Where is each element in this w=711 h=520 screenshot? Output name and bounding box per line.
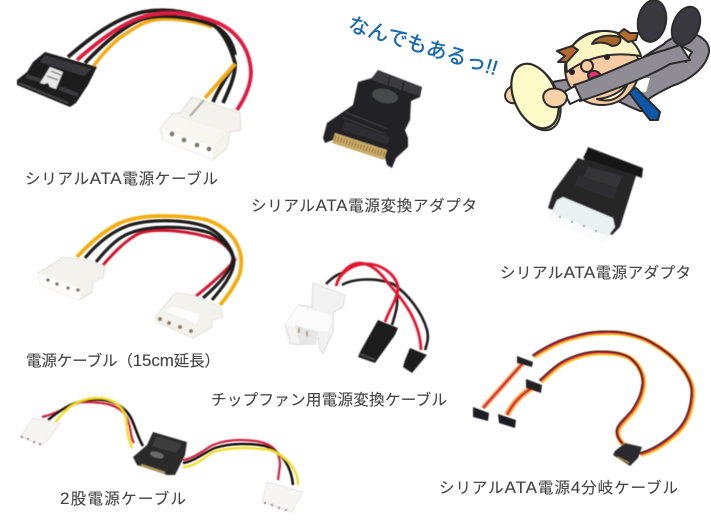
shirt (628, 78, 650, 92)
face (569, 69, 575, 75)
product: power cable 15cm extension (38, 216, 241, 338)
shoes (635, 0, 669, 44)
caption: power cable 15cm extension: 電源ケーブル（15cm延長） (26, 351, 220, 370)
product: SATA power adapter (548, 147, 643, 243)
caption: SATA power conversion adapter: シリアルATA電源変換アダプタ (251, 196, 477, 215)
caption: SATA power cable: シリアルATA電源ケーブル (25, 169, 218, 188)
caption: SATA power adapter: シリアルATA電源アダプタ (500, 263, 691, 282)
main SATA connector (613, 443, 642, 466)
product: chip fan power conversion cable (285, 263, 428, 373)
far arm (552, 76, 590, 92)
front hand (543, 89, 567, 107)
caption: SATA power four-branch cable: シリアルATA電源4分岐ケーブル (439, 478, 678, 497)
callout: nandemo aru: なんでもあるっ!! (346, 13, 500, 80)
white Molex connector (160, 97, 241, 160)
cartoon: businessman diving with disc (502, 0, 709, 138)
white Molex connector right (155, 293, 223, 338)
black SATA connector (17, 52, 97, 107)
SATA connector centre (133, 432, 187, 475)
black header connector large (358, 320, 398, 363)
near arm (574, 45, 690, 101)
caption: chip fan power conversion cable: チップファン用電源変換ケーブル (211, 390, 447, 409)
legs and body (605, 33, 709, 112)
disc (504, 58, 570, 138)
head (565, 31, 639, 105)
white Molex connector left (38, 257, 105, 300)
back hand (505, 86, 520, 104)
product: SATA power four-branch cable (473, 331, 693, 466)
Molex connector left (20, 418, 60, 445)
white fan connector (285, 283, 345, 353)
caption: two-branch power cable: 2股電源ケーブル (60, 489, 186, 508)
product: SATA power conversion adapter (323, 70, 422, 168)
black header connector small (403, 348, 427, 373)
product: two-branch power cable (20, 398, 303, 512)
product: SATA power cable (17, 10, 251, 160)
Molex connector right (262, 482, 303, 512)
tie (627, 88, 660, 120)
branch connectors (517, 356, 533, 367)
